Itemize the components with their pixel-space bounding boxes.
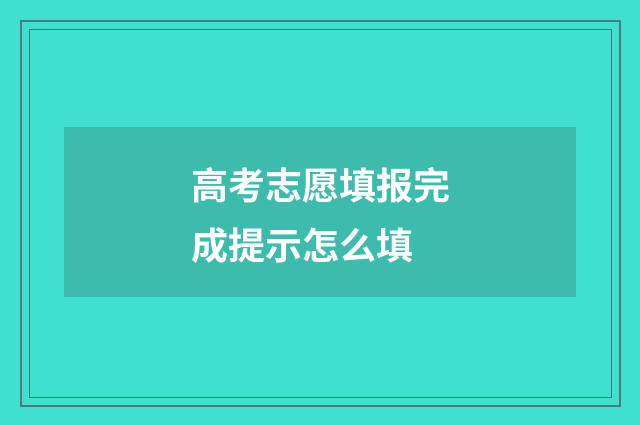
title text: 高考志愿填报完	[191, 166, 450, 207]
title panel	[64, 127, 576, 297]
inner frame	[29, 29, 612, 398]
title text: 成提示怎么填	[191, 226, 413, 267]
title text	[191, 166, 450, 267]
